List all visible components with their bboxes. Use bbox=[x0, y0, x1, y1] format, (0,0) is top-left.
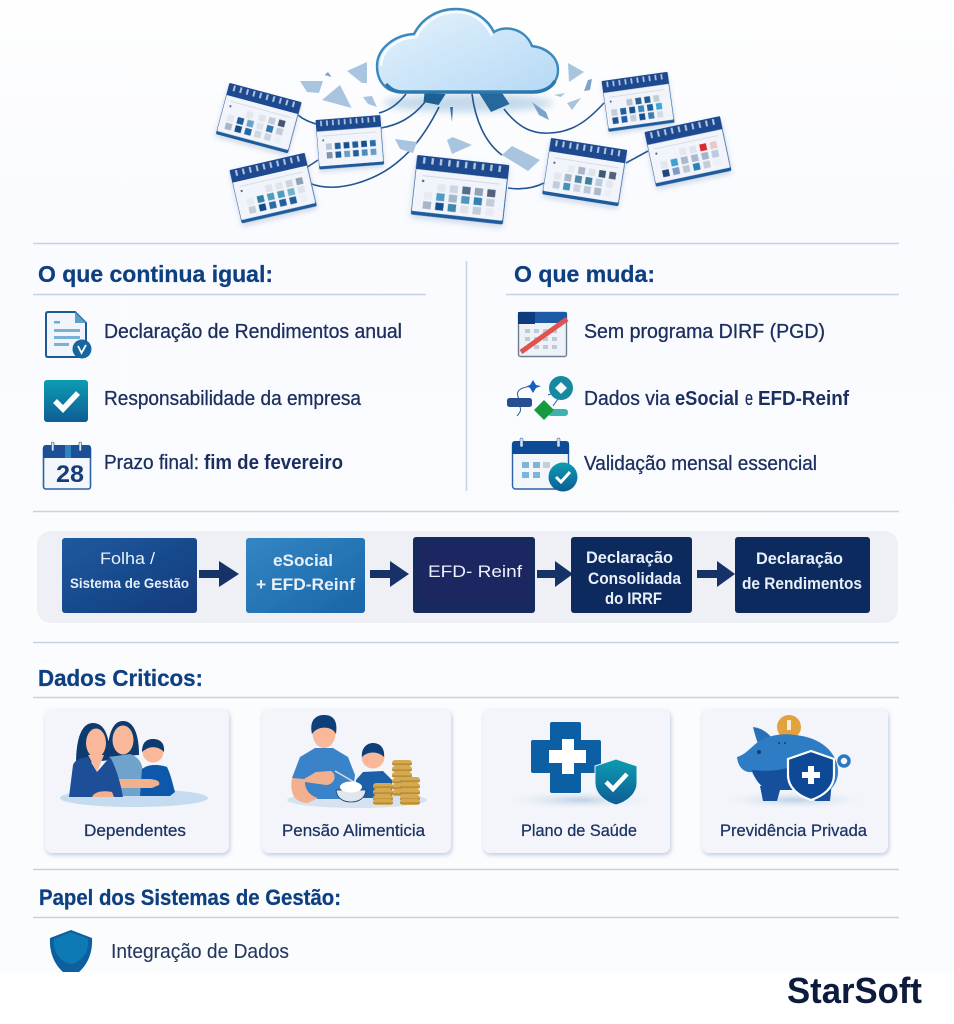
label: dependentes: Dependentes bbox=[84, 821, 186, 840]
text: validacao mensal essencial: Validação mensal essencial bbox=[584, 453, 817, 475]
card: plano de saude bbox=[483, 709, 670, 853]
icon: crossed-out calendar bbox=[518, 312, 567, 356]
label: previdencia privada: Previdência Privada bbox=[720, 821, 868, 840]
text: dados via esocial e efd-reinf bbox=[584, 388, 849, 410]
cloud connectors bbox=[424, 93, 510, 112]
icon: shield bbox=[50, 930, 92, 972]
panel: o que continua igual bbox=[38, 261, 402, 489]
card: previdencia privada bbox=[702, 709, 888, 853]
calendar 5 bbox=[542, 138, 627, 206]
card: pensao alimenticia bbox=[262, 709, 451, 853]
heading: dados criticos: Dados Criticos: bbox=[38, 665, 203, 691]
text: prazo final: Prazo final: bbox=[104, 452, 199, 474]
card: dependentes bbox=[45, 709, 229, 853]
text: sem programa dirf: Sem programa DIRF (PGD) bbox=[584, 321, 825, 343]
arrow 1 bbox=[199, 561, 239, 587]
heading: papel dos sistemas de gestao: Papel dos Sistemas de Gestão: bbox=[39, 885, 341, 910]
text: dados via esocial e efd-reinf: eSocial bbox=[675, 388, 739, 410]
arrow 4 bbox=[697, 561, 735, 587]
paper shards bbox=[300, 62, 592, 171]
calendar 2 bbox=[316, 115, 384, 169]
text: prazo final: fim de fevereiro bbox=[204, 452, 343, 474]
label: pensao alimenticia: Pensão Alimenticia bbox=[282, 821, 426, 840]
step: declaracao de rendimentos bbox=[735, 537, 870, 613]
text: responsabilidade da empresa: Responsabilidade da empresa bbox=[104, 388, 362, 410]
step: declaracao consolidada do irrf bbox=[571, 537, 692, 613]
step: folha / sistema de gestao: Folha / bbox=[100, 549, 155, 568]
illustration: cloud connected to calendars bbox=[216, 9, 732, 225]
divider lines bbox=[33, 244, 899, 918]
text: declaracao de rendimentos anual: Declaração de Rendimentos anual bbox=[104, 321, 402, 343]
step: declaracao consolidada do irrf: Declaração bbox=[586, 548, 673, 567]
text: dados via esocial e efd-reinf: Dados via bbox=[584, 388, 671, 410]
step: folha / sistema de gestao bbox=[62, 538, 197, 613]
text: prazo final bbox=[104, 452, 343, 474]
logo: starsoft: StarSoft bbox=[787, 970, 922, 1011]
icon: calendar with check bbox=[512, 438, 578, 492]
step: esocial + efd-reinf: + EFD-Reinf bbox=[256, 575, 355, 594]
calendar 4 bbox=[411, 155, 509, 225]
text: dados via esocial e efd-reinf: e bbox=[745, 388, 753, 410]
step: declaracao de rendimentos: de Rendimentos bbox=[742, 574, 862, 593]
item: integracao de dados bbox=[50, 930, 289, 972]
panel: process flow bbox=[37, 531, 898, 623]
arrow 3 bbox=[537, 561, 573, 587]
icon: piggy bank with shield bbox=[723, 715, 867, 809]
icon: father, child and coins bbox=[287, 715, 427, 808]
flow background bbox=[37, 531, 898, 623]
icon: calendar 28 bbox=[43, 442, 91, 489]
step: efd-reinf bbox=[413, 537, 535, 613]
panel: o que muda bbox=[507, 261, 849, 492]
step: declaracao de rendimentos: Declaração bbox=[756, 549, 843, 568]
step: esocial + efd-reinf: eSocial bbox=[273, 551, 333, 570]
step: declaracao consolidada do irrf: do IRRF bbox=[605, 589, 662, 608]
cloud shadow bbox=[383, 94, 553, 112]
step: esocial + efd-reinf bbox=[246, 538, 365, 613]
heading: o que muda: O que muda: bbox=[514, 261, 655, 287]
step: efd-reinf: EFD- Reinf bbox=[428, 562, 522, 581]
icon: check square bbox=[44, 380, 88, 422]
step: folha / sistema de gestao: Sistema de Gestão bbox=[70, 576, 189, 591]
calendar 6 bbox=[602, 72, 675, 132]
icon: data flow bbox=[507, 376, 573, 420]
step: declaracao consolidada do irrf: Consolidada bbox=[588, 569, 681, 588]
calendar 3 bbox=[229, 153, 317, 223]
calendar 7 bbox=[644, 116, 732, 187]
heading: o que continua igual: O que continua igual: bbox=[38, 261, 273, 287]
icon: document with check bbox=[46, 312, 92, 358]
icon: calendar 28: 28 bbox=[56, 461, 84, 488]
cloud bbox=[377, 9, 558, 92]
text: integracao de dados: Integração de Dados bbox=[111, 941, 289, 963]
icon: family bbox=[60, 721, 208, 807]
icon: medical cross with shield bbox=[506, 722, 654, 809]
label: plano de saude: Plano de Saúde bbox=[521, 821, 637, 840]
text: dados via esocial e efd-reinf: EFD-Reinf bbox=[758, 388, 849, 410]
arrow 2 bbox=[370, 561, 409, 587]
calendar 1 bbox=[216, 83, 302, 153]
connecting wires bbox=[298, 94, 648, 189]
